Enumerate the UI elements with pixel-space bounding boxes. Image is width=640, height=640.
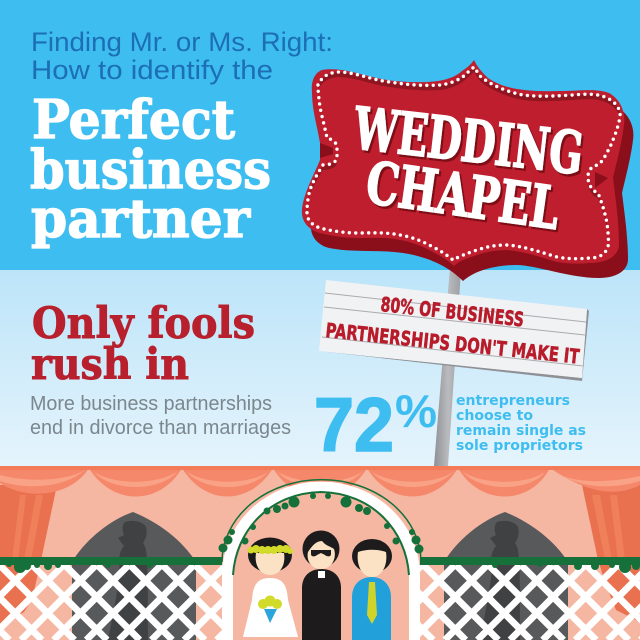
intro heading: How to identify the [31,55,273,85]
grey silhouette arch right [444,512,568,640]
stat description: entrepreneurs [456,393,570,409]
wedding chapel sign: CHAPEL [362,149,564,243]
pale sky background [0,270,640,466]
priest [302,530,341,640]
plank text [324,292,581,369]
intro heading [31,27,333,85]
ivy on arch [218,492,424,575]
sign pole [434,255,462,466]
ivy garland left [0,557,222,573]
top blue background [0,0,640,270]
main title: Perfect [32,89,235,151]
white lattice fence [0,565,640,640]
pink wall [0,466,640,640]
body text [30,393,291,439]
plank text: 80% OF BUSINESS [379,292,525,332]
stat description: sole proprietors [456,438,583,454]
white plank sign [319,280,589,381]
grey silhouette arch left [72,512,196,640]
left side curtain [0,485,57,626]
groom [352,539,392,640]
body text: More business partnerships [30,393,272,415]
main title: business [30,139,271,201]
subheading: only fools rush in: rush in [31,340,189,390]
bouquet [258,596,282,623]
right side curtain [582,485,640,622]
white garden arch [222,480,421,640]
stat description: remain single as [456,423,586,439]
curtain valance [0,466,640,496]
ivy garland right [420,557,640,573]
main title [30,89,271,250]
main title: partner [31,188,251,250]
wedding chapel sign [302,60,633,281]
flower crown [248,545,293,554]
subheading: only fools rush in: Only fools [32,299,255,349]
stat: 72 percent: 72 [314,383,394,468]
stat description: choose to [456,408,533,424]
body text: end in divorce than marriages [30,417,291,439]
stat description [456,393,586,454]
stat: 72 percent [314,383,437,468]
intro heading: Finding Mr. or Ms. Right: [31,27,333,57]
bride [243,538,298,637]
stat: 72 percent: % [395,385,437,437]
subheading: only fools rush in [31,299,255,390]
